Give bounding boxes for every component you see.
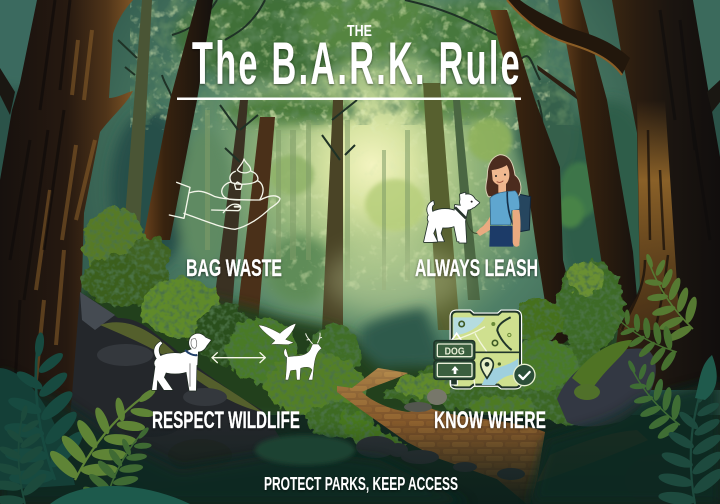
double arrow xyxy=(212,353,265,363)
label: always leash: ALWAYS LEASH xyxy=(415,255,538,282)
lower right boulder, log and stones xyxy=(356,340,695,504)
label: know where: KNOW WHERE xyxy=(434,407,546,434)
deer xyxy=(284,333,322,380)
footer tagline: PROTECT PARKS, KEEP ACCESS xyxy=(264,474,458,494)
dog sign: DOG xyxy=(445,347,465,358)
trail xyxy=(337,368,545,504)
label: respect wildlife: RESPECT WILDLIFE xyxy=(152,407,300,434)
foreground ferns right xyxy=(601,248,720,504)
dark foreground xyxy=(0,370,720,504)
foreground ferns left xyxy=(0,326,190,504)
title rule xyxy=(177,98,521,100)
right bushes xyxy=(338,339,600,446)
right trees xyxy=(490,0,720,390)
background trunks xyxy=(118,0,545,330)
left bushes xyxy=(81,207,374,438)
icon: trail map with sign and check xyxy=(434,312,535,387)
left big tree xyxy=(0,0,133,504)
dog xyxy=(424,193,479,243)
distant mist and undergrowth xyxy=(325,244,624,368)
second tree xyxy=(143,0,213,240)
ground base xyxy=(0,287,720,504)
icon: dog, arrow, bird and deer xyxy=(152,323,322,391)
check badge xyxy=(514,364,535,386)
lower left rock xyxy=(70,292,300,490)
bird xyxy=(258,323,296,345)
label: bag waste: BAG WASTE xyxy=(186,255,282,282)
dog xyxy=(152,334,211,391)
hiker xyxy=(476,155,531,247)
icon: hand holding waste xyxy=(169,159,280,229)
icon: dog on leash with hiker xyxy=(424,155,531,247)
small title: THE: THE xyxy=(347,23,372,40)
map xyxy=(452,312,520,387)
